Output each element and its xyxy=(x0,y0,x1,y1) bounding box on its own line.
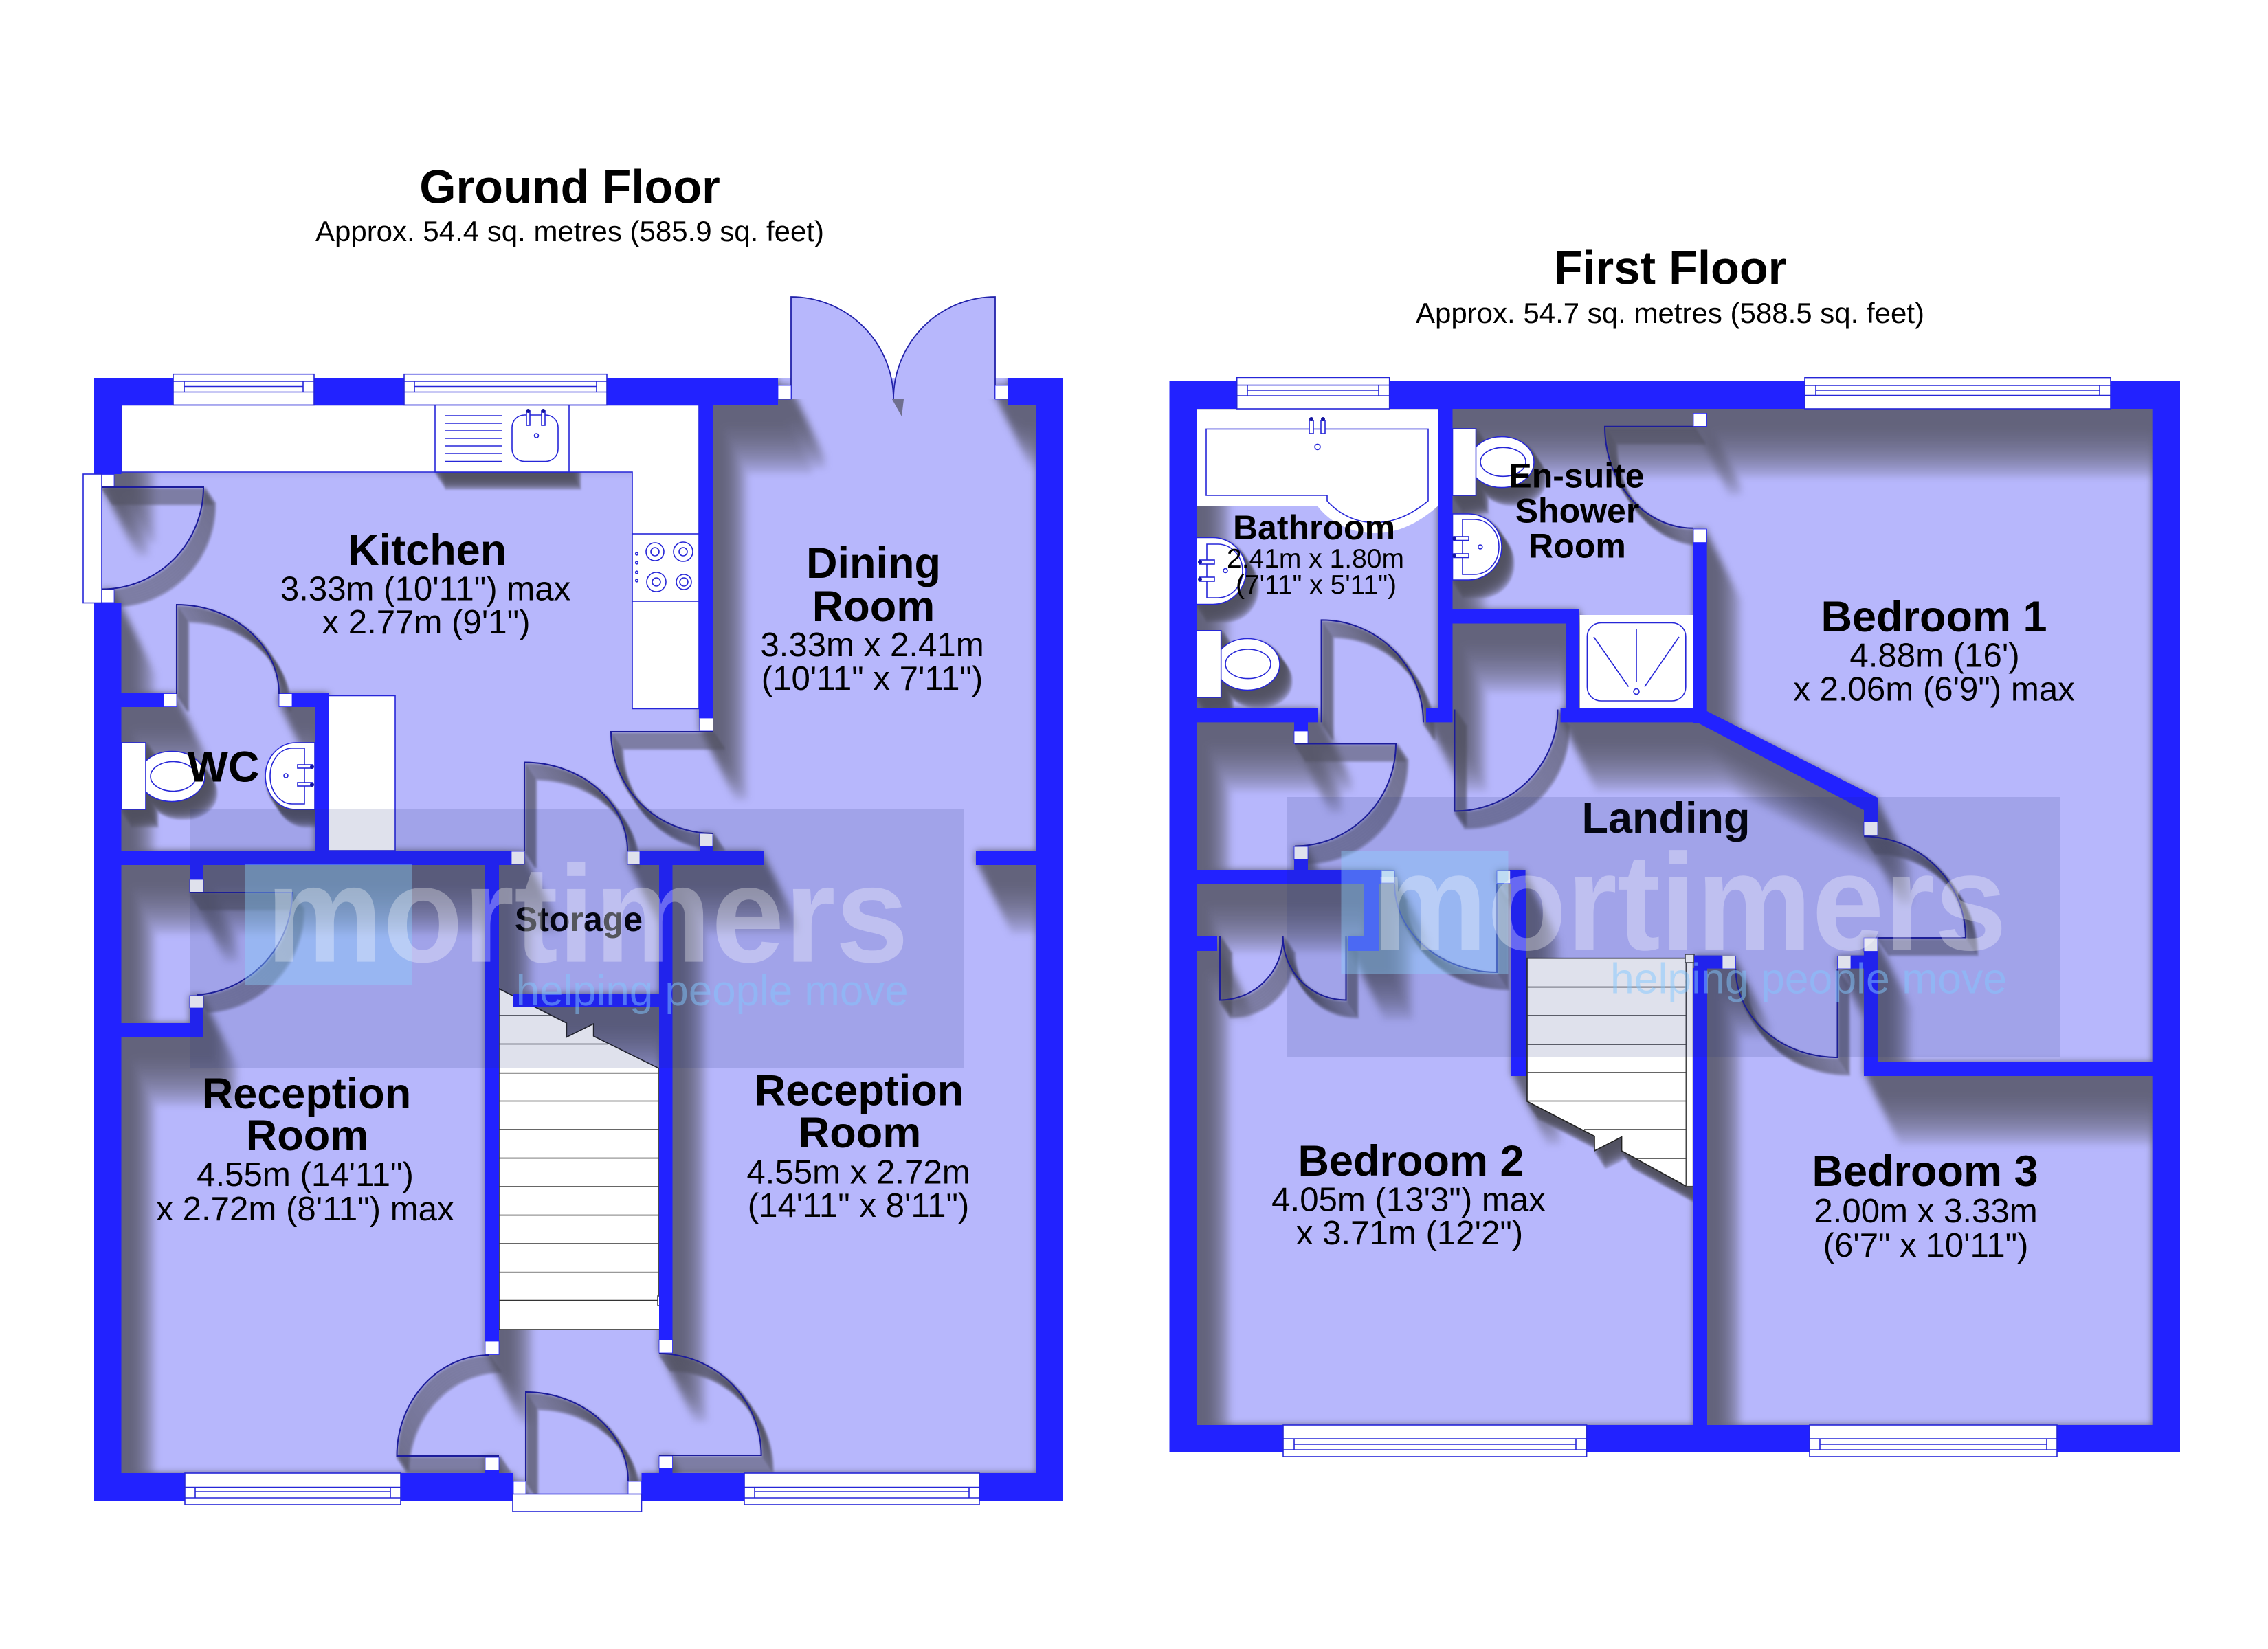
label: reception room right: Room xyxy=(799,1109,921,1157)
label: kitchen: Kitchen xyxy=(348,526,507,574)
label: storage: Storage xyxy=(515,900,643,939)
WC basin xyxy=(265,743,315,809)
label: bedroom 3: Bedroom 3 xyxy=(1812,1147,2038,1196)
first floor door swings xyxy=(1220,427,1966,1057)
first floor base area xyxy=(1170,381,2180,1452)
label: bathroom: 2.41m x 1.80m xyxy=(1227,544,1404,574)
label: bedroom 3 xyxy=(1812,1147,2038,1264)
label: reception room right: 4.55m x 2.72m xyxy=(746,1153,970,1191)
label: dining room: 3.33m x 2.41m xyxy=(760,626,984,664)
watermark: first floor: helping people move xyxy=(1610,955,2007,1003)
ground floor plan xyxy=(83,297,1063,1512)
en-suite toilet xyxy=(1453,429,1534,495)
first floor wall shadows xyxy=(1170,381,2180,1452)
reception window left xyxy=(185,1473,401,1505)
ground floor door swings xyxy=(102,487,761,1481)
label: en-suite shower room xyxy=(1509,457,1645,565)
WC fixtures xyxy=(121,743,315,809)
label: reception room left xyxy=(156,1070,454,1228)
ground floor walls xyxy=(94,378,1063,1501)
label: bedroom 2 xyxy=(1271,1137,1546,1252)
first floor windows xyxy=(1237,377,2111,1457)
ground floor staircase xyxy=(499,989,671,1330)
label: bedroom 3: 2.00m x 3.33m xyxy=(1814,1192,2038,1230)
label: reception room right: (14'11" x 8'11") xyxy=(748,1187,969,1224)
first floor plan xyxy=(1170,377,2180,1457)
bathroom basin xyxy=(1197,537,1246,605)
label: reception room left: Reception xyxy=(202,1070,411,1118)
label: kitchen xyxy=(280,526,571,641)
label: bedroom 1: 4.88m (16') xyxy=(1849,636,2020,675)
label: dining room: Room xyxy=(812,583,935,631)
ground floor base area xyxy=(94,378,1063,1501)
bath xyxy=(1197,409,1438,533)
first floor title xyxy=(1416,242,1924,329)
ground floor title xyxy=(315,161,824,247)
label: bedroom 1: Bedroom 1 xyxy=(1821,593,2047,641)
label: dining room xyxy=(760,539,984,697)
first floor title: Approx. 54.7 sq. metres (588.5 sq. feet) xyxy=(1416,297,1924,329)
watermark: ground floor: helping people move xyxy=(516,967,909,1015)
first floor staircase xyxy=(1527,954,1694,1187)
label: reception room left: Room xyxy=(246,1112,368,1160)
first floor door shadows xyxy=(1220,427,1966,1057)
ground floor door shadows xyxy=(102,487,761,1481)
front door frame xyxy=(513,1494,642,1512)
first floor title: First Floor xyxy=(1554,242,1786,294)
label: bedroom 1: x 2.06m (6'9") max xyxy=(1793,671,2075,708)
french door tip shadow xyxy=(892,399,904,416)
label: en-suite shower room: En-suite xyxy=(1509,457,1645,495)
label: landing: Landing xyxy=(1582,794,1750,842)
label: kitchen: 3.33m (10'11") max xyxy=(280,570,571,608)
kitchen side door frame xyxy=(83,474,102,603)
label: en-suite shower room: Room xyxy=(1528,527,1626,565)
label: reception room left: x 2.72m (8'11") max xyxy=(156,1190,454,1228)
WC toilet xyxy=(121,743,205,809)
label: dining room: Dining xyxy=(806,539,941,587)
bathroom window xyxy=(1237,377,1390,409)
first floor walls xyxy=(1170,381,2180,1452)
watermark: ground floor: mortimers xyxy=(266,838,909,991)
label: reception room right: Reception xyxy=(755,1067,964,1115)
tall unit beside WC xyxy=(329,695,395,851)
sink unit xyxy=(435,405,569,472)
bedroom 1 window xyxy=(1805,378,2111,409)
label: bedroom 1 xyxy=(1793,593,2075,708)
watermark: first floor xyxy=(1287,797,2060,1057)
first floor fixture shadows xyxy=(1197,429,1534,697)
kitchen worktop xyxy=(121,405,699,709)
watermark: ground floor xyxy=(190,809,964,1068)
watermark: first floor: mortimers xyxy=(1372,826,2007,979)
french doors xyxy=(791,297,995,399)
label: kitchen: x 2.77m (9'1") xyxy=(322,603,530,641)
ground floor title: Approx. 54.4 sq. metres (585.9 sq. feet) xyxy=(315,215,824,247)
label: WC: WC xyxy=(188,743,259,792)
ground floor title: Ground Floor xyxy=(419,161,720,213)
label: reception room left: 4.55m (14'11") xyxy=(197,1156,414,1193)
WC fixture shadows xyxy=(121,743,315,809)
label: en-suite shower room: Shower xyxy=(1515,492,1639,530)
label: bedroom 2: x 3.71m (12'2") xyxy=(1296,1214,1523,1252)
shower tray xyxy=(1580,615,1693,708)
bathroom toilet xyxy=(1197,631,1280,697)
stair underside shadow xyxy=(1527,958,1686,1186)
label: bedroom 3: (6'7" x 10'11") xyxy=(1823,1226,2028,1264)
sink unit shadow xyxy=(435,412,569,472)
hob xyxy=(632,534,699,601)
ground floor windows xyxy=(83,374,979,1512)
kitchen window 1 xyxy=(173,374,314,405)
bedroom 3 window xyxy=(1810,1425,2057,1457)
kitchen window 2 xyxy=(404,374,607,405)
label: reception room right xyxy=(746,1067,970,1224)
en-suite basin xyxy=(1452,514,1502,580)
first floor fixtures xyxy=(1197,429,1534,697)
label: bathroom: Bathroom xyxy=(1233,508,1395,547)
ground floor wall shadows xyxy=(94,378,1063,1501)
label: bathroom xyxy=(1227,508,1404,600)
ground floor door jamb squares xyxy=(102,385,1008,1494)
first floor door jamb squares xyxy=(1294,413,1878,969)
label: bathroom: (7'11" x 5'11") xyxy=(1236,570,1397,600)
label: bedroom 2: Bedroom 2 xyxy=(1298,1137,1524,1185)
bedroom 2 window xyxy=(1283,1425,1587,1457)
label: bedroom 2: 4.05m (13'3") max xyxy=(1271,1181,1546,1219)
reception window right xyxy=(744,1473,979,1505)
label: dining room: (10'11" x 7'11") xyxy=(761,660,983,697)
